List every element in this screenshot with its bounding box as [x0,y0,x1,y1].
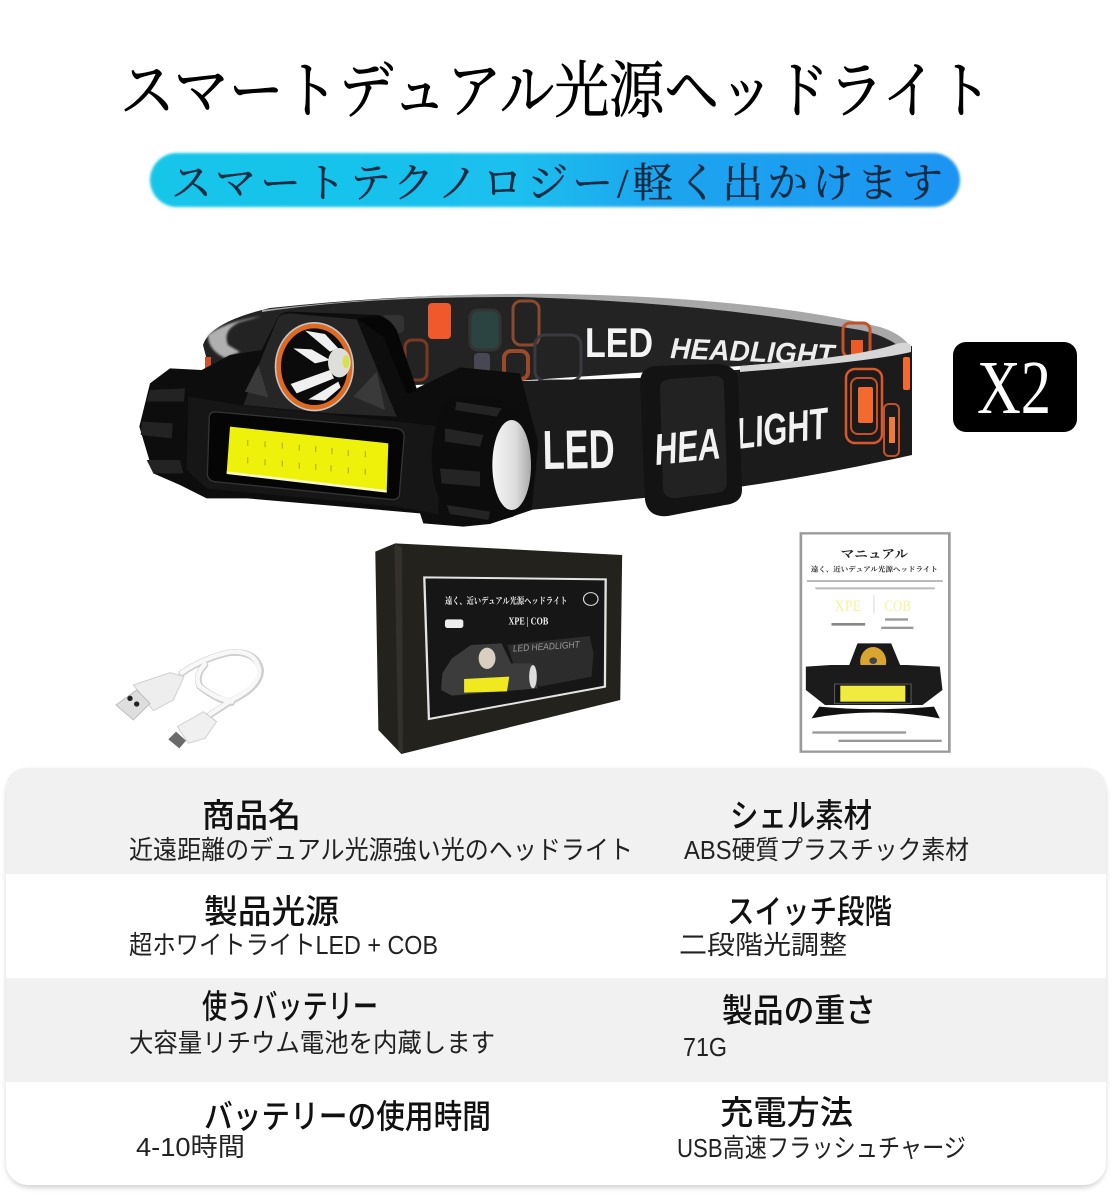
front band lettering: LED [542,418,615,481]
right knurled cap [432,398,536,523]
box label: 遠く、近いデュアル光源ヘッドライト [445,595,567,607]
lamp body [187,397,440,514]
row: product name [129,797,633,865]
subtitle banner: スマートテクノロジー/軽く出かけます [171,160,943,206]
row: weight [683,992,876,1062]
row: switch levels [679,893,892,960]
row: shell material [684,797,969,865]
badge X2: X2 [977,346,1051,430]
front band pattern [846,357,910,456]
row: switch levels: 二段階光調整 [679,930,847,960]
back band pattern [382,301,870,381]
manual leaflet: マニュアル [841,547,908,561]
row: battery life: バッテリーの使用時間 [204,1098,491,1135]
row: weight: 製品の重さ [722,992,876,1029]
row: weight: 71G [683,1032,727,1062]
row: battery: 大容量リチウム電池を内蔵します [129,1028,495,1058]
badge X2 [953,342,1077,432]
row: charging: 充電方法 [720,1094,853,1131]
head tower [243,313,417,417]
micro USB plug [168,712,217,748]
manual leaflet: COB [884,597,911,615]
product box [375,543,622,754]
back band lettering: LED [585,319,653,366]
row: light source: 超ホワイトライトLED + COB [129,930,438,960]
left knurled cap [141,388,185,473]
USB-A plug [116,673,184,720]
USB cable [116,652,261,748]
COB yellow light [227,427,388,493]
reflector [275,322,354,411]
row: light source: 製品光源 [204,893,339,930]
headlamp [139,312,538,527]
manual leaflet: XPE [835,597,861,615]
headband: LIGHT [733,399,833,459]
spec table panel [6,768,1106,1188]
row: battery life: 4-10時間 [136,1132,245,1162]
band back interior [203,295,912,390]
row: battery life [136,1098,491,1162]
row: switch levels: スイッチ段階 [727,893,892,930]
row: 3 background [6,978,1106,1082]
box label: XPE | COB [508,616,549,627]
lamp silhouette [139,312,538,527]
cable loop [182,652,261,715]
manual leaflet [801,533,949,752]
row: charging [677,1094,966,1163]
lens [492,420,531,510]
row: battery [129,988,495,1058]
row: battery: 使うバッテリー [202,988,378,1025]
headband [203,294,912,516]
row: product name: 商品名 [202,797,301,834]
COB panel frame [207,412,404,500]
row: product name: 近遠距離のデュアル光源強い光のヘッドライト [129,835,633,865]
front band [520,346,912,510]
row: light source [129,893,438,960]
headband: HEADLIGHT [670,333,837,372]
manual headlamp image [806,643,942,718]
row: 1 background [6,768,1106,874]
title: スマートデュアル光源ヘッドライト [120,58,992,126]
buckle [640,364,742,516]
buckle: HEA [652,419,723,475]
manual leaflet: 遠く、近いデュアル光源ヘッドライト [811,564,938,574]
row: shell material: ABS硬質プラスチック素材 [684,835,969,865]
box label [424,577,606,719]
row: shell material: シェル素材 [730,797,872,834]
box label: LED HEADLIGHT [512,640,581,654]
row: charging: USB高速フラッシュチャージ [677,1133,966,1163]
